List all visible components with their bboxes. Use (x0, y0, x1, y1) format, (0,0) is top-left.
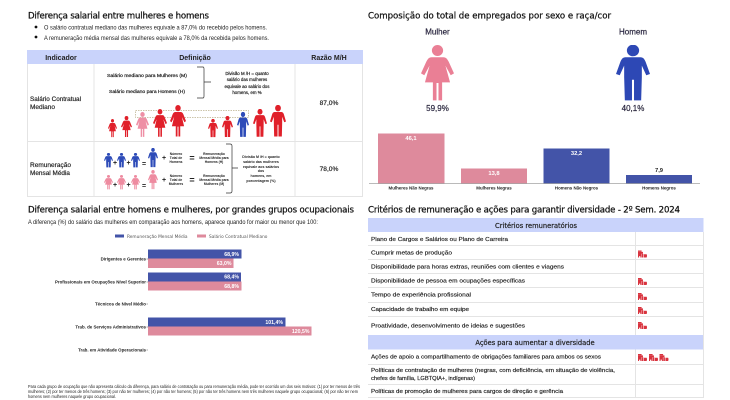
criteria rows: Plano de Cargos e Salários ou Plano de Carreira (371, 237, 509, 243)
bar chart: composition: 13,8 (488, 171, 500, 177)
value: 87,0%: 87,0% (320, 100, 338, 107)
formula text: Número (170, 152, 182, 156)
formula text: Homens (H) (205, 160, 223, 164)
text block: salary bullets: A remuneração média mensal das mulheres equivale a 78,0% da recebida pelos homens. (44, 35, 269, 42)
icons: women average formula (104, 170, 158, 189)
formula text: Mulheres (169, 182, 183, 186)
subtitle: A diferença (%) do salário das mulheres em comparação aos homens, aparece quando for maior ou menor que 100: (28, 219, 318, 226)
formula operators: = (189, 175, 195, 185)
text block: salary bullets: O salário contratual mediano das mulheres equivale a 87,0% do recebido pelos homens. (44, 24, 267, 32)
formula operators: + (126, 182, 131, 189)
row label: monthly pay: Remuneração (30, 162, 72, 169)
panel: employee composition (368, 12, 700, 190)
formula text: Total de (170, 156, 182, 160)
criteria rows: Políticas de contratação de mulheres (negras, com deficiência, em situação de violência, (371, 368, 615, 374)
formula operators (113, 153, 195, 190)
bar chart: composition: 46,1 (405, 136, 417, 142)
bar chart: occupational groups (55, 250, 312, 352)
criteria rows: Políticas de promoção de mulheres para cargos de direção e gerência (371, 389, 564, 395)
table header: Definição (179, 55, 211, 62)
definition: median salary text: Salário mediano para Mulheres (M) (107, 73, 188, 78)
brace: average pay (226, 144, 238, 193)
bar chart: composition (369, 134, 700, 190)
chart legend: Remuneração Mensal Média (127, 233, 188, 240)
criteria rows: Proatividade, desenvolvimento de ideias e sugestões (371, 324, 525, 330)
definition: M/H division: equivale ao salário dos (225, 84, 270, 89)
definition: median salary text (107, 73, 188, 94)
bar chart: occupational groups: Dirigentes e Gerentes (101, 256, 147, 262)
footnote: homens nem mulheres naquele grupo ocupacional. (28, 394, 116, 399)
panel: salary difference by occupational group (28, 206, 361, 399)
icon: woman 59,9%: 59,9% (426, 104, 449, 113)
row label: monthly pay (30, 162, 72, 177)
chart legend (115, 233, 268, 240)
bar chart: occupational groups: 68,8% (224, 284, 239, 290)
definition: M/H division: Divisão M /H = quanto (225, 71, 269, 76)
formula text: Mulheres (M) (204, 182, 224, 186)
criteria rows: Disponibilidade para horas extras, reuniões com clientes e viagens (371, 264, 564, 270)
definition: average division: dos (258, 169, 264, 173)
criteria rows: Tempo de experiência profissional (371, 292, 471, 298)
definition: average division: homens, em (251, 174, 271, 178)
dashed median box (136, 110, 248, 118)
row label: contractual salary (30, 96, 81, 111)
formula text: Total de (170, 178, 182, 182)
bar chart: composition: Homens Não Negros (555, 186, 599, 190)
table: indicators (27, 50, 363, 197)
formula operators: + (113, 182, 117, 189)
criteria rows: Cumprir metas de produção (371, 250, 452, 256)
formula operators: + (126, 160, 131, 167)
icon: man 40,1%: 40,1% (622, 104, 644, 113)
definition: M/H division: salário das mulheres (227, 77, 268, 82)
heading: composition: Composição do total de empregados por sexo e raça/cor (368, 12, 611, 22)
row label: contractual salary: Mediano (30, 104, 56, 111)
definition: average division: equivale aos salários (243, 165, 279, 169)
icon: man 40,1%: Homem (619, 28, 647, 36)
definition: median salary text: Salário mediano para Homens (H) (109, 89, 186, 94)
bar chart: composition: Mulheres Não Negras (389, 186, 434, 190)
table header: Indicador (45, 55, 77, 62)
formula operators: = (142, 183, 146, 190)
heading: salary difference: Diferença salarial entre mulheres e homens (28, 12, 210, 22)
icon: woman 59,9% (421, 28, 454, 113)
definition: average division (242, 155, 281, 183)
heading: criteria: Critérios de remuneração e ações para garantir diversidade - 2º Sem. 2024 (368, 204, 680, 216)
bar chart: occupational groups: 68,9% (224, 252, 239, 258)
definition: average division: salário das mulheres (243, 160, 279, 164)
formula operators: + (162, 155, 166, 162)
panel: remuneration criteria and diversity actions (368, 204, 704, 398)
table header: Razão M/H (311, 55, 347, 62)
icon: man 40,1% (616, 28, 650, 113)
definition: average division: Divisão M /H = quanto (242, 155, 281, 159)
formula text: Mensal Média para (199, 156, 229, 160)
bar chart: occupational groups: Trab. de Serviços Administrativos (75, 324, 147, 330)
icons: red markers (638, 250, 668, 361)
footnote: Para cada grupo de ocupação que não apresenta cálculo da diferença, para salário de contratação ou para remuneração média, pode ter ocorrido um dos seis motivos: (1) por ter menos de três (28, 384, 361, 389)
bar chart: occupational groups: 120,5% (292, 329, 310, 335)
formula operators: + (113, 160, 117, 167)
bar chart: composition: Mulheres Negras (476, 186, 512, 190)
bar chart: occupational groups: Profissionais em Ocupações Nível Superior (55, 280, 146, 284)
table section headers: Critérios remuneratórios (495, 222, 577, 230)
panel: salary difference between women and men (27, 12, 363, 197)
icons: men average formula (104, 148, 158, 167)
bar chart: occupational groups: 63,0% (217, 261, 232, 267)
formula text: Remuneração (203, 174, 225, 178)
bar chart: composition: 7,9 (655, 168, 664, 174)
formula operators: + (162, 177, 166, 184)
formula text: Remuneração (203, 152, 225, 156)
table: criteria (368, 218, 704, 398)
table section headers: Ações para aumentar a diversidade (475, 339, 595, 347)
row label: monthly pay: Mensal Média (30, 170, 71, 177)
heading: occupational groups: Diferença salarial entre homens e mulheres, por grandes grupos ocupacionais (28, 206, 355, 216)
icons: men salary line (208, 105, 286, 137)
table header (45, 55, 347, 62)
formula operators: = (142, 161, 146, 168)
chart legend: Salário Contratual Mediano (209, 233, 268, 240)
icons: women salary line (108, 105, 186, 137)
formula text (169, 152, 229, 186)
footnote (28, 384, 361, 399)
value: 78,0%: 78,0% (320, 166, 338, 173)
formula text: Mensal Média para (199, 178, 229, 182)
criteria rows: chefes de família, LGBTQIA+, indígenas) (371, 376, 475, 382)
footnote: mulheres; (2) por ter menos de três homens; (3) por não ter mulheres; (4) por não ter homens; (5) por não ter três homens nem três mulheres naquele grupo ocupacional; (6) por não ter nem (28, 389, 358, 394)
row label: contractual salary: Salário Contratual (30, 96, 81, 103)
definition: M/H division: homens, em % (232, 90, 262, 95)
bar chart: composition: Homens Negros (642, 186, 676, 190)
bar chart: occupational groups: Trab. em Atividade Operacionais (78, 348, 147, 352)
criteria rows: Disponibilidade de pessoa em ocupações específicas (371, 278, 525, 284)
formula operators: = (189, 153, 195, 163)
bar chart: occupational groups: 68,4% (224, 274, 239, 280)
criteria rows (371, 237, 615, 395)
formula text: Número (170, 174, 182, 178)
text block: salary bullets (35, 24, 269, 42)
icon: woman 59,9%: Mulher (425, 28, 450, 36)
formula text: Homens (169, 160, 183, 164)
bar chart: occupational groups: Técnicos de Nível Médio (95, 302, 146, 306)
criteria rows: Ações de apoio a compartilhamento de obrigações familiares para ambos os sexos (371, 354, 601, 360)
brace: median salary (197, 67, 211, 98)
definition: M/H division (225, 71, 270, 95)
bar chart: occupational groups: 101,4% (265, 320, 283, 326)
criteria rows: Capacidade de trabalho em equipe (371, 307, 469, 313)
table section headers (475, 222, 595, 347)
bar chart: composition: 32,2 (571, 151, 582, 157)
definition: average division: porcentagem (%) (246, 179, 276, 183)
